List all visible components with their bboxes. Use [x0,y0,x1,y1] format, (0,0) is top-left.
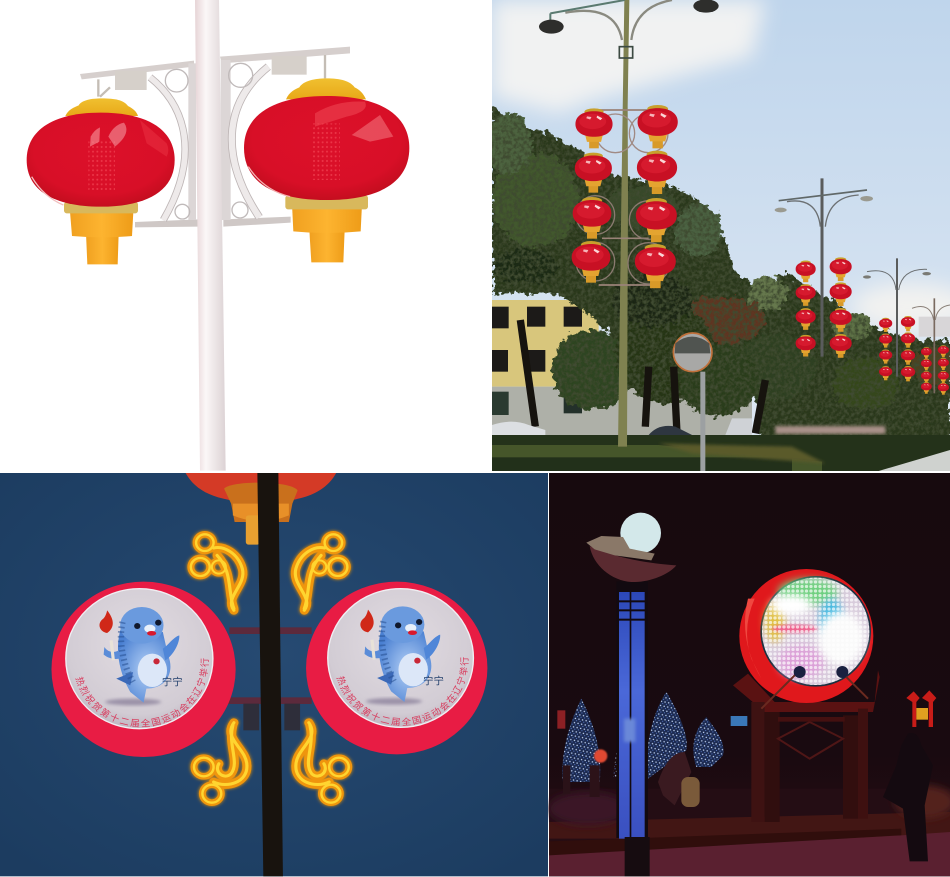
main lamp post [539,0,719,447]
hedges [492,435,950,471]
ground and wall [548,785,950,876]
silhouette person [883,733,933,861]
LED moon display [739,569,873,709]
right sign logo: 宁宁 [423,675,444,688]
panel: double lantern fixture on white background [26,0,410,471]
tree masses [485,107,950,440]
lamp post with blue light strips [616,581,650,876]
traffic mirror [673,333,712,471]
clouds [492,0,950,330]
night sky [549,473,950,876]
left round sign [52,582,236,757]
left sign slogan: 热烈祝贺第十二届全国运动会在辽宁举行 [75,658,209,728]
left sign face [66,589,213,729]
building [492,300,752,437]
trunks [520,320,765,433]
neon cloud ornaments [191,534,349,803]
park visitors [563,752,700,807]
right round sign [306,582,488,754]
main lantern stack [572,105,678,288]
timber gate frame [733,670,880,822]
second lamp post with lanterns [775,178,873,358]
panel: night plaza with lamp and LED moon display [548,473,950,876]
right mascot [360,606,440,705]
left sign logo: 宁宁 [162,676,183,688]
parked cars [492,418,885,437]
far building and fourth lamp post [912,298,950,395]
road [879,450,950,471]
sky [492,0,950,471]
background signs and lights [557,710,747,763]
third lamp post with lanterns [863,258,931,381]
bracket frame [80,47,350,227]
small red lantern sign [906,690,936,727]
right sign slogan: 热烈祝贺第十二届全国运动会在辽宁举行 [336,657,469,726]
dusk sky [0,473,548,876]
top lantern [186,473,336,545]
drum mallets [761,674,868,709]
pole [195,0,226,471]
right sign face [328,589,473,727]
LED screen [760,576,871,687]
lit trees [562,692,724,782]
pole [257,473,283,876]
left lantern [27,98,175,264]
left mascot [99,607,179,705]
panel: dusk pole with mascot signs and yellow neon clouds [0,473,548,876]
globe lamp and bowl planter [586,513,676,582]
right lantern [244,78,409,262]
cross arms [228,627,312,730]
panel: street view with rows of lantern poles [492,0,950,471]
